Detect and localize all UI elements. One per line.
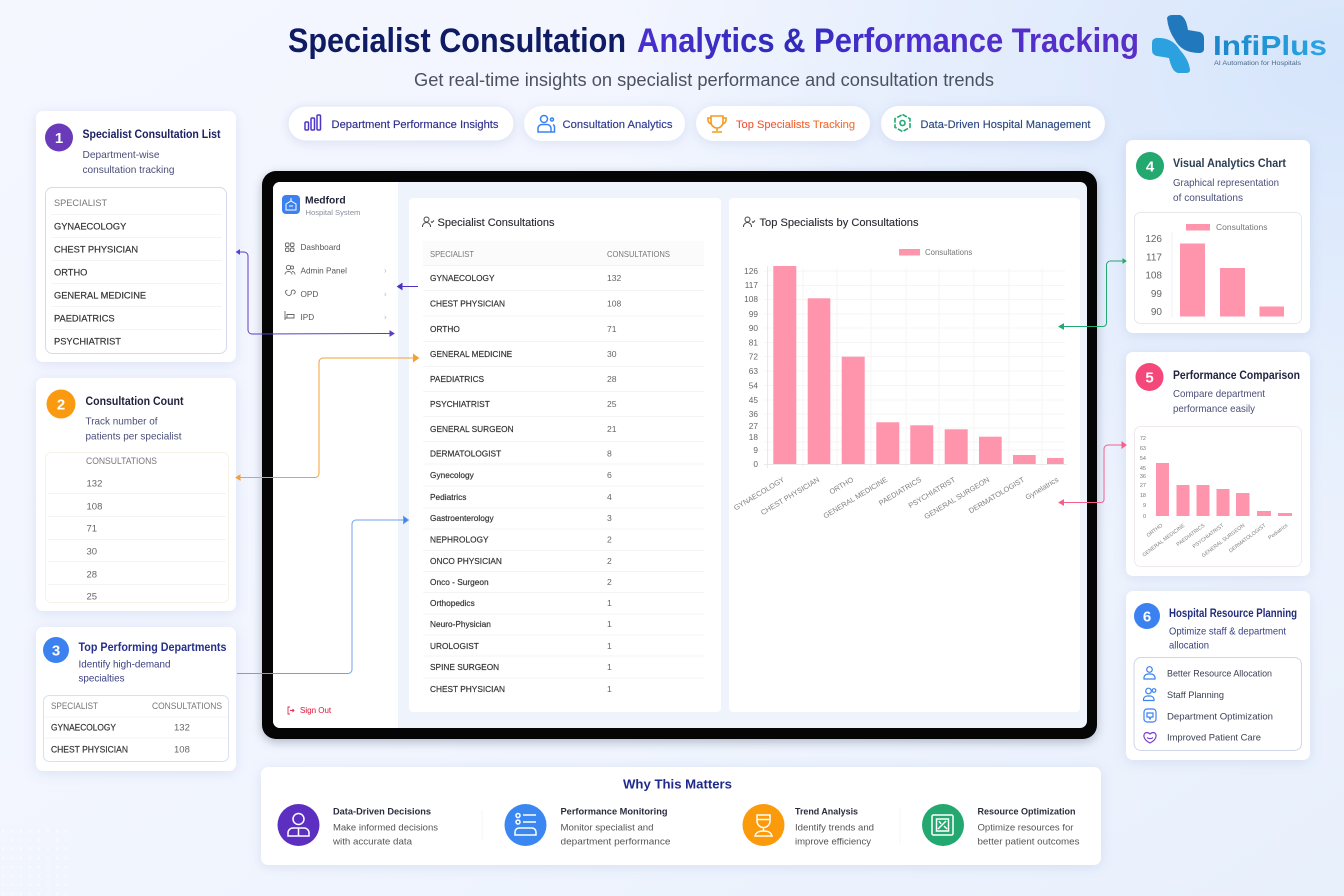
badge 1: 1 xyxy=(55,130,63,147)
pill: Consultation Analytics: Consultation Analytics xyxy=(562,119,673,131)
heading: Top Performing Departments xyxy=(78,640,227,654)
bar chart: 9 xyxy=(753,445,758,455)
table: DERMATOLOGIST xyxy=(430,448,501,458)
description: specialties xyxy=(78,672,124,684)
description: of consultations xyxy=(1173,192,1243,204)
menu: IPD: › xyxy=(384,312,387,322)
icon: person xyxy=(744,217,755,227)
item: Resource Optimization xyxy=(922,804,1080,846)
description: Track number of xyxy=(86,416,158,428)
table: 28 xyxy=(607,374,617,384)
table: CONSULTATIONS xyxy=(607,250,670,259)
badge 1 xyxy=(45,124,73,152)
table: UROLOGIST xyxy=(430,641,479,651)
resource list: Improved Patient Care xyxy=(1167,732,1261,742)
badge 3 xyxy=(43,637,69,663)
pill: Data-Driven Hospital Management xyxy=(881,106,1105,141)
bar chart: PAEDIATRICS xyxy=(877,475,923,508)
icon: doctor xyxy=(288,814,309,836)
table: Orthopedics xyxy=(430,598,475,608)
icon: bar chart xyxy=(305,115,320,130)
description xyxy=(1173,177,1279,204)
mini chart: 27 xyxy=(1140,483,1146,489)
chart heading: Top Specialists by Consultations xyxy=(760,217,919,229)
heading: Why This Matters xyxy=(623,776,732,792)
menu: OPD: › xyxy=(384,290,387,298)
logo: InfiPlus xyxy=(1152,15,1327,73)
bar chart: 90 xyxy=(749,323,758,333)
bar chart: GENERAL SURGEON xyxy=(923,475,991,521)
table: PSYCHIATRIST xyxy=(430,399,490,409)
mini table: 30 xyxy=(86,546,97,558)
sidebar xyxy=(273,182,398,728)
menu: OPD xyxy=(286,290,387,299)
menu: Admin Panel: › xyxy=(384,266,387,275)
resource list: Staff Planning xyxy=(1167,690,1224,700)
description: consultation tracking xyxy=(82,164,175,176)
arrow: purple double arrow xyxy=(398,284,418,290)
arrow: purple connector panel 1 xyxy=(236,250,394,336)
item: Resource Optimization: better patient outcomes xyxy=(978,836,1080,846)
description xyxy=(1169,626,1286,652)
table: Neuro-Physician xyxy=(430,619,491,629)
description: Compare department xyxy=(1173,388,1265,400)
table: Gastroenterology xyxy=(430,513,494,523)
pill: Department Performance Insights xyxy=(288,106,514,141)
mini chart: GENERAL MEDICINE xyxy=(1142,522,1187,559)
mini chart: 54 xyxy=(1140,456,1146,462)
description: Graphical representation xyxy=(1173,177,1279,189)
menu: Admin Panel: Admin Panel xyxy=(300,266,347,276)
description: Identify high-demand xyxy=(78,658,171,670)
menu: Dashboard: Dashboard xyxy=(300,243,341,252)
icon: gear xyxy=(895,114,910,132)
heading: Consultation Count xyxy=(86,394,184,408)
bar chart: 72 xyxy=(749,352,758,362)
table: Onco - Surgeon xyxy=(430,577,489,587)
bar chart: CHEST PHYSICIAN xyxy=(759,475,821,517)
description xyxy=(82,149,175,176)
mini chart: GENERAL SURGEON xyxy=(1201,523,1246,559)
heading: Visual Analytics Chart xyxy=(1173,156,1286,170)
panel: 5 Performance Comparison xyxy=(1126,352,1310,576)
item: Data-Driven Decisions: Data-Driven Decisions xyxy=(333,806,431,816)
table xyxy=(423,241,704,694)
pill: Data-Driven Hospital Management: Data-Driven Hospital Management xyxy=(920,119,1090,131)
table: 132 xyxy=(607,273,622,283)
table: SPINE SURGEON xyxy=(430,662,499,672)
menu: IPD xyxy=(285,311,387,322)
table: 1 xyxy=(607,684,612,694)
pill: Department Performance Insights: Department Performance Insights xyxy=(332,119,499,131)
bar chart: PSYCHIATRIST xyxy=(907,475,957,510)
table: 2 xyxy=(607,556,612,566)
panel: 4 Visual Analytics Chart xyxy=(1126,140,1310,333)
mini table: CONSULTATIONS xyxy=(86,456,157,466)
badge 5: 5 xyxy=(1145,370,1154,386)
mini chart: 0 xyxy=(1143,514,1146,520)
item: Data-Driven Decisions: with accurate data xyxy=(332,836,413,846)
bar chart: 108 xyxy=(744,294,758,304)
icon: allocation xyxy=(1144,667,1155,679)
table: 108 xyxy=(607,298,622,308)
description: patients per specialist xyxy=(86,430,182,442)
icon: trophy xyxy=(755,815,772,836)
hospital name: Hospital System xyxy=(306,208,360,217)
mini table: PSYCHIATRIST xyxy=(54,336,121,346)
mini table: 71 xyxy=(86,524,97,534)
item: Data-Driven Decisions: Make informed decisions xyxy=(333,822,438,832)
pill: Top Specialists Tracking xyxy=(696,106,870,141)
panel: 1 Specialist Consultation List xyxy=(36,111,236,362)
bar chart: 27 xyxy=(749,421,758,431)
bar chart: 18 xyxy=(749,432,758,442)
sign out: Sign Out xyxy=(300,706,332,715)
menu: IPD: IPD xyxy=(300,313,314,322)
tablet mockup xyxy=(262,171,1097,739)
table: Gynecology xyxy=(430,470,475,480)
table: GENERAL SURGEON xyxy=(430,424,514,434)
icon: list xyxy=(515,814,536,835)
table: 25 xyxy=(607,399,617,409)
sidebar logo xyxy=(282,195,300,214)
hospital name xyxy=(305,196,360,217)
item: Resource Optimization: Optimize resources for xyxy=(978,822,1074,832)
bar chart: GYNAECOLOGY xyxy=(732,475,786,512)
badge 6 xyxy=(1134,603,1160,629)
mini chart: 90 xyxy=(1151,307,1162,318)
mini chart: DERMATOLOGIST xyxy=(1228,522,1268,554)
logo: InfiPlus: AI Automation for Hospitals xyxy=(1214,60,1302,67)
item: Performance Monitoring xyxy=(504,804,670,846)
panel: Why This Matters xyxy=(261,767,1101,865)
table: 1 xyxy=(607,598,612,608)
mini table: 108 xyxy=(174,744,190,756)
table: 21 xyxy=(607,424,617,434)
mini table: CHEST PHYSICIAN xyxy=(51,744,128,754)
mini chart: 63 xyxy=(1140,446,1146,452)
badge 6: 6 xyxy=(1143,608,1151,626)
bar chart: 81 xyxy=(749,338,758,348)
panel: 3 Top Performing Departments xyxy=(36,627,236,771)
menu: OPD: OPD xyxy=(300,290,318,299)
logo: InfiPlus: InfiPlus xyxy=(1213,30,1327,61)
mini chart: 108 xyxy=(1145,270,1162,282)
table: 6 xyxy=(607,470,612,480)
mini table: GYNAECOLOGY xyxy=(54,222,126,232)
panel: 6 Hospital Resource Planning xyxy=(1126,591,1310,760)
bar chart: 99 xyxy=(749,309,758,319)
mini table: GYNAECOLOGY xyxy=(51,722,116,732)
bar chart: GENERAL MEDICINE xyxy=(822,475,889,520)
description: Department-wise xyxy=(82,149,160,161)
mini chart: Consultations xyxy=(1216,222,1268,232)
table: ONCO PHYSICIAN xyxy=(430,556,502,566)
bar chart: 45 xyxy=(749,395,758,405)
mini table: 132 xyxy=(86,478,102,490)
mini chart: 18 xyxy=(1140,493,1146,499)
arrow: pink connector panel 5 xyxy=(1059,442,1126,505)
description xyxy=(1173,388,1265,415)
table: GYNAECOLOGY xyxy=(430,273,495,283)
panel: 2 Consultation Count xyxy=(36,378,236,611)
item: Performance Monitoring: Performance Monitoring xyxy=(560,806,668,816)
resource list: Better Resource Allocation xyxy=(1167,668,1272,678)
legend: Consultations xyxy=(925,248,972,257)
bar chart: DERMATOLOGIST xyxy=(967,475,1026,515)
mini chart xyxy=(1134,212,1302,324)
bar chart: 117 xyxy=(745,280,758,290)
table: ORTHO xyxy=(430,324,460,334)
bar chart: 126 xyxy=(744,266,758,276)
item: Trend Analysis xyxy=(742,804,874,846)
description: Optimize staff & department xyxy=(1169,626,1286,638)
table: 3 xyxy=(607,513,612,523)
mini table: PAEDIATRICS xyxy=(54,314,115,324)
badge 4 xyxy=(1136,152,1164,180)
heading: Performance Comparison xyxy=(1173,368,1300,382)
icon: trophy xyxy=(708,116,726,132)
arrow: orange connector panel 2 xyxy=(236,354,418,480)
icon: staff xyxy=(1144,688,1156,700)
item: Trend Analysis: improve efficiency xyxy=(795,836,871,846)
title xyxy=(288,22,1139,60)
mini table: GENERAL MEDICINE xyxy=(54,290,146,300)
table: 1 xyxy=(607,662,612,672)
bar chart xyxy=(732,266,1067,521)
resource list xyxy=(1134,658,1302,750)
mini chart: 36 xyxy=(1140,474,1146,480)
table: SPECIALIST xyxy=(430,250,474,259)
table: NEPHROLOGY xyxy=(430,534,489,544)
mini chart: 126 xyxy=(1145,234,1162,245)
description: performance easily xyxy=(1173,403,1256,415)
icon: person xyxy=(422,217,434,227)
subtitle: Get real-time insights on specialist performance and consultation trends xyxy=(414,70,994,90)
mini table: SPECIALIST xyxy=(54,198,107,208)
mini table xyxy=(44,696,228,762)
bar chart: 36 xyxy=(749,409,758,419)
menu: Admin Panel xyxy=(285,265,387,276)
mini chart: 99 xyxy=(1151,289,1162,300)
table: 4 xyxy=(607,492,612,502)
table: 71 xyxy=(607,324,617,334)
bar chart: 63 xyxy=(749,366,758,376)
title: Specialist Consultation xyxy=(288,22,626,60)
badge 2: 2 xyxy=(57,396,65,414)
mini table: ORTHO xyxy=(54,268,87,278)
heading: Specialist Consultation List xyxy=(82,127,220,141)
item: Performance Monitoring: Monitor specialist and xyxy=(560,822,654,832)
resource list: Department Optimization xyxy=(1167,712,1273,722)
table: GENERAL MEDICINE xyxy=(430,349,513,359)
mini table: 132 xyxy=(174,722,190,734)
panel: Specialist Consultations table xyxy=(409,198,721,712)
mini chart: PSYCHIATRIST xyxy=(1192,522,1226,550)
icon: users xyxy=(538,116,555,132)
badge 4: 4 xyxy=(1146,158,1155,176)
badge 2 xyxy=(46,390,76,418)
icon: chip xyxy=(932,815,953,835)
hospital name: Medford xyxy=(305,196,346,206)
description xyxy=(78,658,171,684)
mini chart: 45 xyxy=(1140,466,1146,472)
icon: department xyxy=(1144,709,1156,722)
item: Performance Monitoring: department performance xyxy=(560,836,670,846)
item: Trend Analysis: Trend Analysis xyxy=(795,806,858,816)
mini chart: 9 xyxy=(1143,503,1146,509)
description: allocation xyxy=(1169,640,1209,652)
table: 1 xyxy=(607,641,612,651)
bar chart: 0 xyxy=(753,459,758,469)
badge 5 xyxy=(1136,363,1164,391)
bar chart: 54 xyxy=(749,380,758,390)
panel: Top Specialists by Consultations chart xyxy=(729,198,1080,712)
bar chart: ORTHO xyxy=(828,475,855,496)
title: Analytics & Performance Tracking xyxy=(637,22,1139,60)
table: Pediatrics xyxy=(430,492,466,502)
icon: heart xyxy=(1144,732,1156,743)
pill: Consultation Analytics xyxy=(524,106,685,141)
table: 8 xyxy=(607,448,612,458)
item: Trend Analysis: Identify trends and xyxy=(795,822,874,832)
mini chart xyxy=(1134,426,1302,566)
mini chart: ORTHO xyxy=(1146,523,1164,539)
mini chart: 117 xyxy=(1146,252,1162,264)
table: 2 xyxy=(607,534,612,544)
pill: Top Specialists Tracking: Top Specialists Tracking xyxy=(736,119,855,131)
table: CHEST PHYSICIAN xyxy=(430,684,505,694)
arrow: green connector panel 4 xyxy=(1059,259,1126,329)
description xyxy=(86,416,182,442)
mini table: 25 xyxy=(86,592,97,602)
legend xyxy=(899,248,972,257)
mini chart: 72 xyxy=(1140,436,1146,442)
table: CHEST PHYSICIAN xyxy=(430,298,505,308)
table: 30 xyxy=(607,349,617,359)
table: 1 xyxy=(607,619,612,629)
table: PAEDIATRICS xyxy=(430,374,485,384)
badge 3: 3 xyxy=(52,642,60,660)
mini chart: Pediatrics xyxy=(1267,523,1290,541)
mini table: 108 xyxy=(86,502,102,512)
arrow: blue connector panel 3 xyxy=(237,516,408,674)
mini chart: PAEDIATRICS xyxy=(1176,522,1207,548)
item: Resource Optimization: Resource Optimization xyxy=(978,806,1076,816)
table: 2 xyxy=(607,577,612,587)
mini table xyxy=(46,188,226,354)
mini table xyxy=(46,452,228,602)
mini table: SPECIALIST xyxy=(51,701,98,711)
item: Data-Driven Decisions xyxy=(278,804,438,846)
mini table: CONSULTATIONS xyxy=(152,701,222,711)
bar chart: Gynelatrics xyxy=(1024,475,1060,502)
heading: Hospital Resource Planning xyxy=(1169,606,1297,620)
mini table: CHEST PHYSICIAN xyxy=(54,244,138,254)
mini table: 28 xyxy=(86,570,97,580)
table heading: Specialist Consultations xyxy=(438,217,555,229)
